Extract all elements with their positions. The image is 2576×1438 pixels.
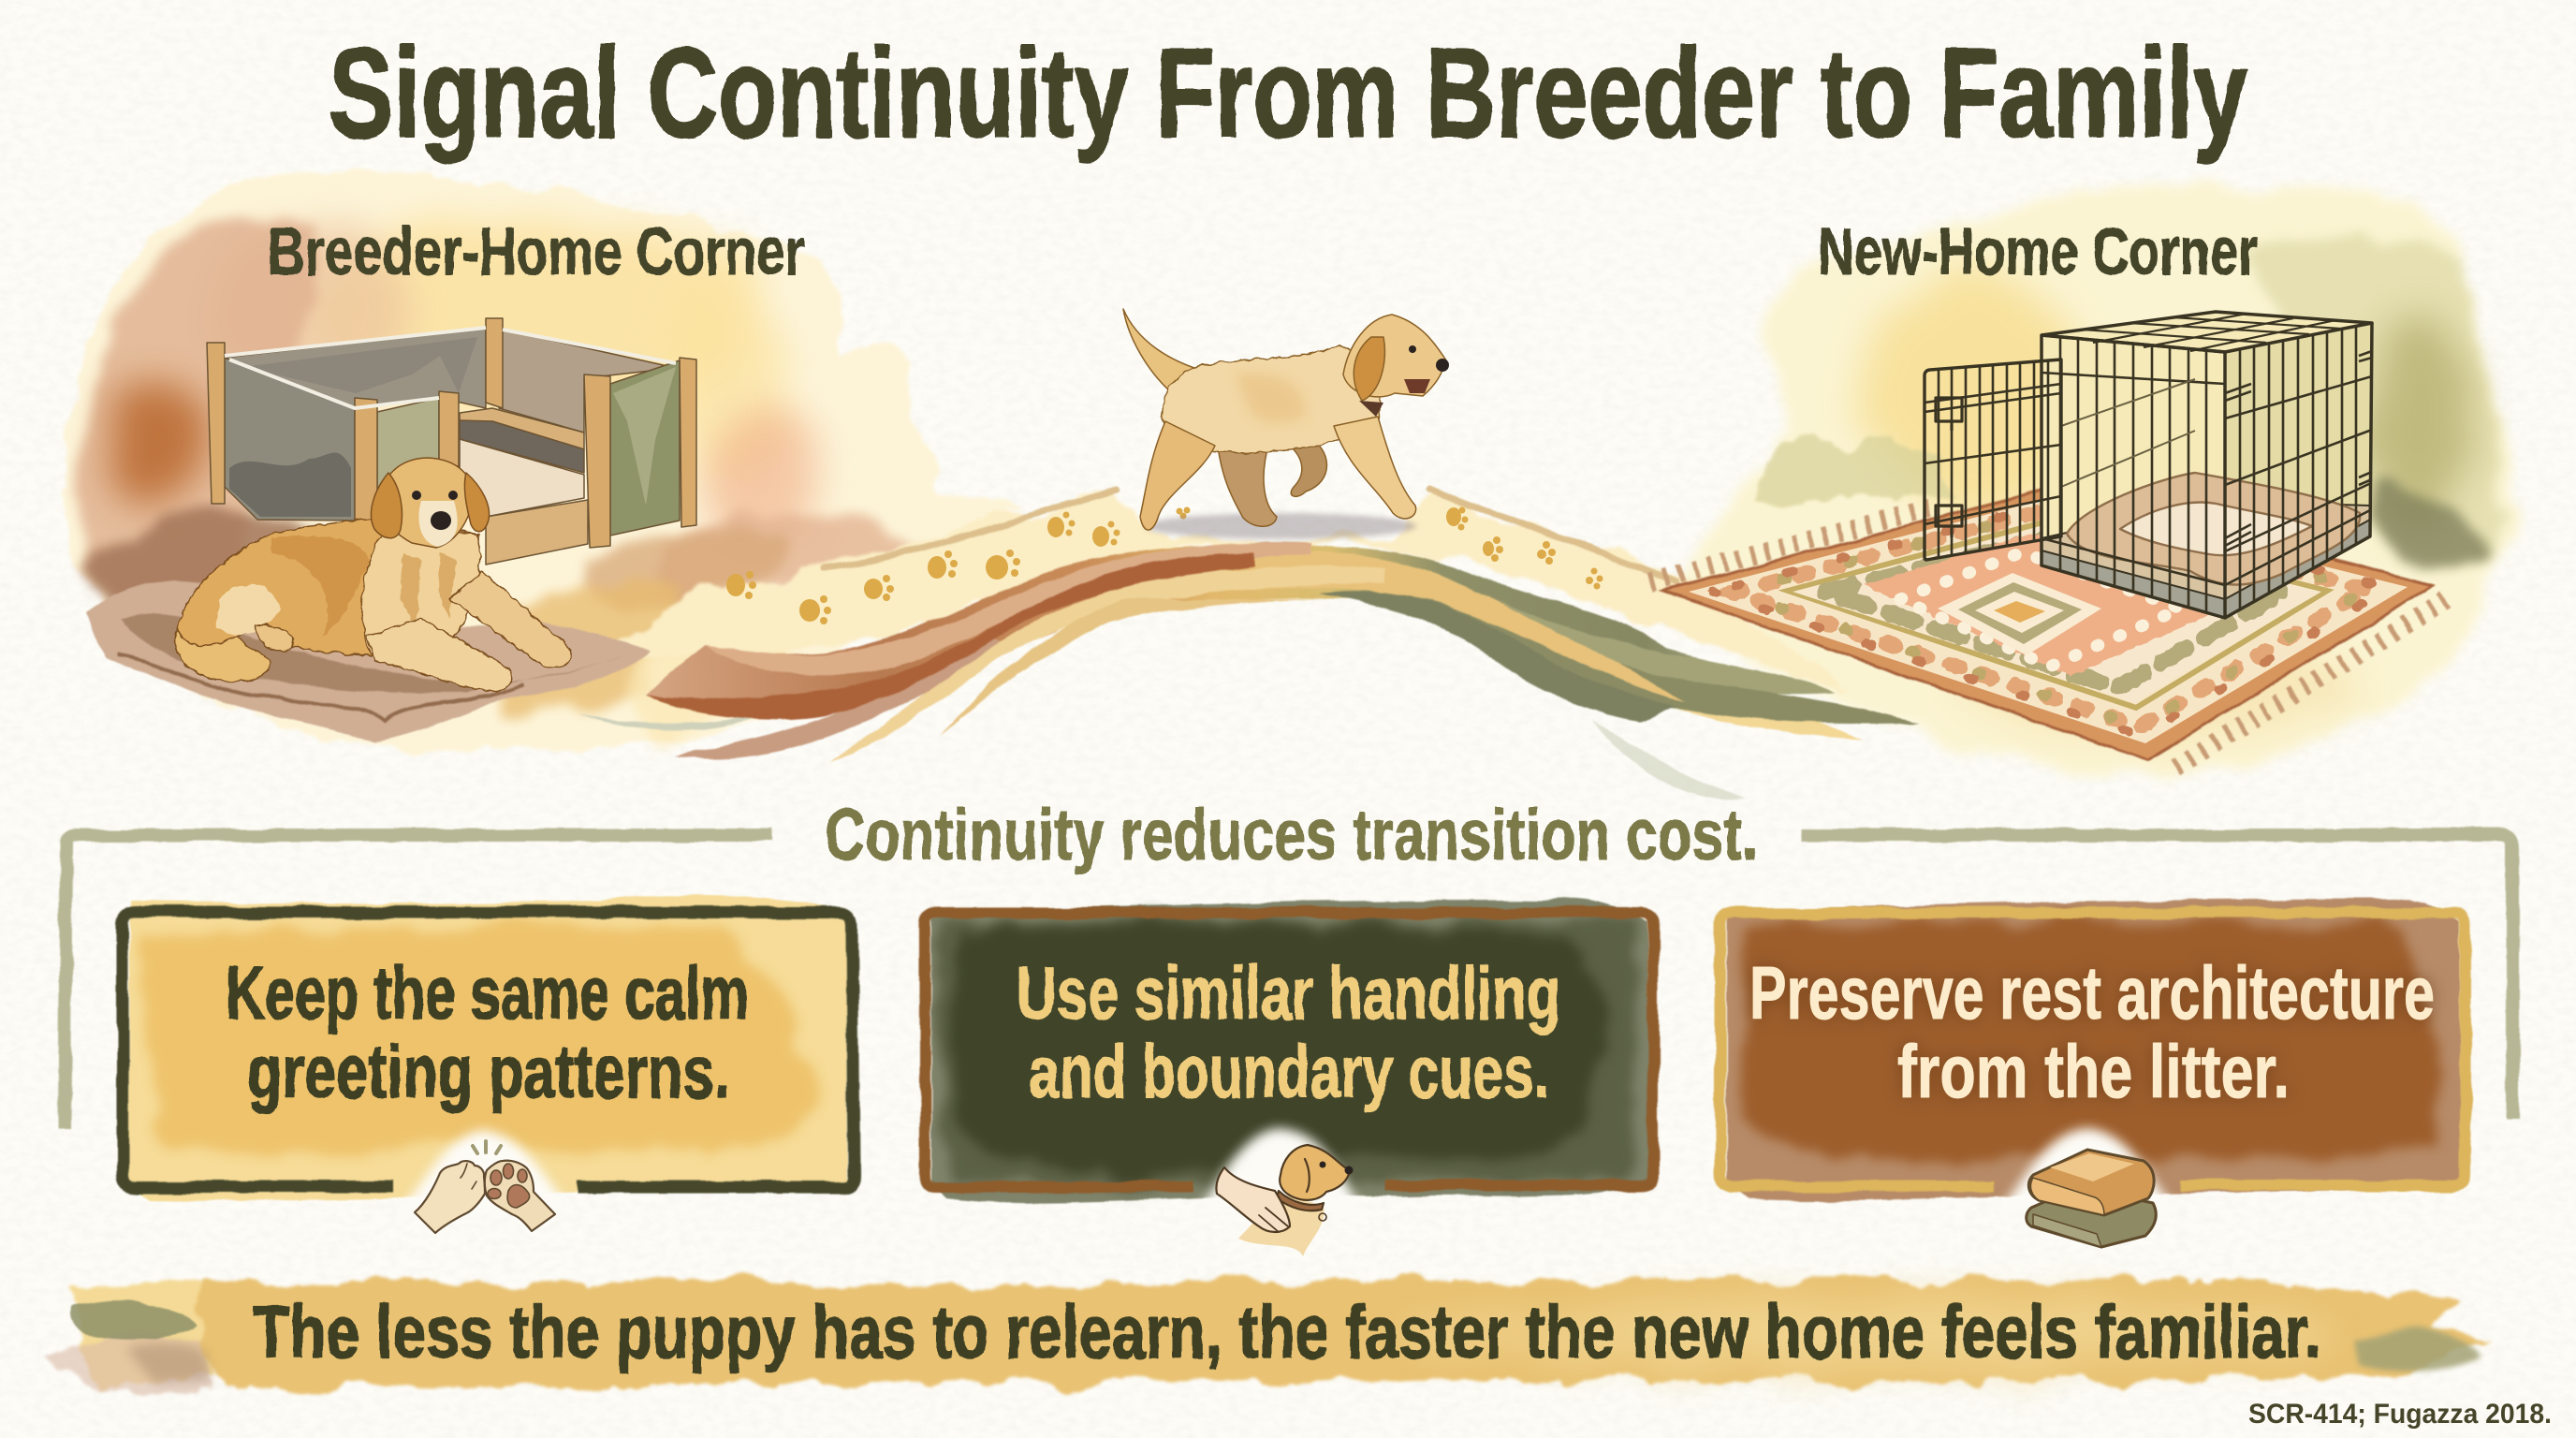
- adult golden retriever lying down: [175, 517, 571, 691]
- wire crate with bed: [1925, 312, 2372, 618]
- panel: new-home corner wash: [1666, 183, 2520, 777]
- icon: notch: [1997, 1128, 2179, 1212]
- label: breeder-home corner: Breeder-Home Corner: [268, 215, 805, 289]
- icon: notch: [1195, 1128, 1365, 1212]
- icon: stacked folded towels: [2027, 1150, 2156, 1247]
- text: greeting card: greeting patterns.: [247, 1030, 730, 1113]
- text: handling card: and boundary cues.: [1029, 1030, 1549, 1113]
- subheading: Continuity reduces transition cost.: [825, 795, 1758, 875]
- takeaway banner: [42, 1278, 2490, 1391]
- adult dog head: [371, 458, 490, 548]
- card: greeting patterns: [123, 895, 854, 1212]
- text: handling card: [1017, 951, 1560, 1113]
- section frame brush strokes: [65, 835, 2513, 1128]
- crate tray: [2042, 501, 2370, 618]
- icon: hand and paw high five: [415, 1141, 555, 1233]
- icon: hand petting puppy: [1216, 1145, 1354, 1256]
- text: rest card: [1749, 951, 2435, 1113]
- text: greeting card: Keep the same calm: [226, 951, 749, 1034]
- ribbon path between corners: [578, 490, 1919, 800]
- text: greeting card: [226, 951, 749, 1113]
- walking puppy: [1123, 309, 1449, 539]
- blanket under adult dog: [85, 580, 650, 742]
- text: handling card: Use similar handling: [1017, 951, 1560, 1034]
- whelping box: [207, 318, 696, 565]
- text: rest card: from the litter.: [1897, 1030, 2290, 1113]
- icon: notch: [396, 1130, 575, 1212]
- ribbon colour streaks: [578, 490, 1919, 800]
- crate bed: [2067, 473, 2360, 585]
- card: rest architecture: [1720, 899, 2466, 1212]
- rug: [1649, 488, 2447, 773]
- panel: breeder-home corner wash: [61, 172, 1024, 755]
- paw prints trail: [726, 507, 1603, 624]
- crate door: [1925, 360, 2061, 560]
- citation: SCR-414; Fugazza 2018.: [2248, 1399, 2552, 1430]
- label: new-home corner: New-Home Corner: [1818, 215, 2258, 289]
- card: handling and boundary cues: [925, 899, 1653, 1212]
